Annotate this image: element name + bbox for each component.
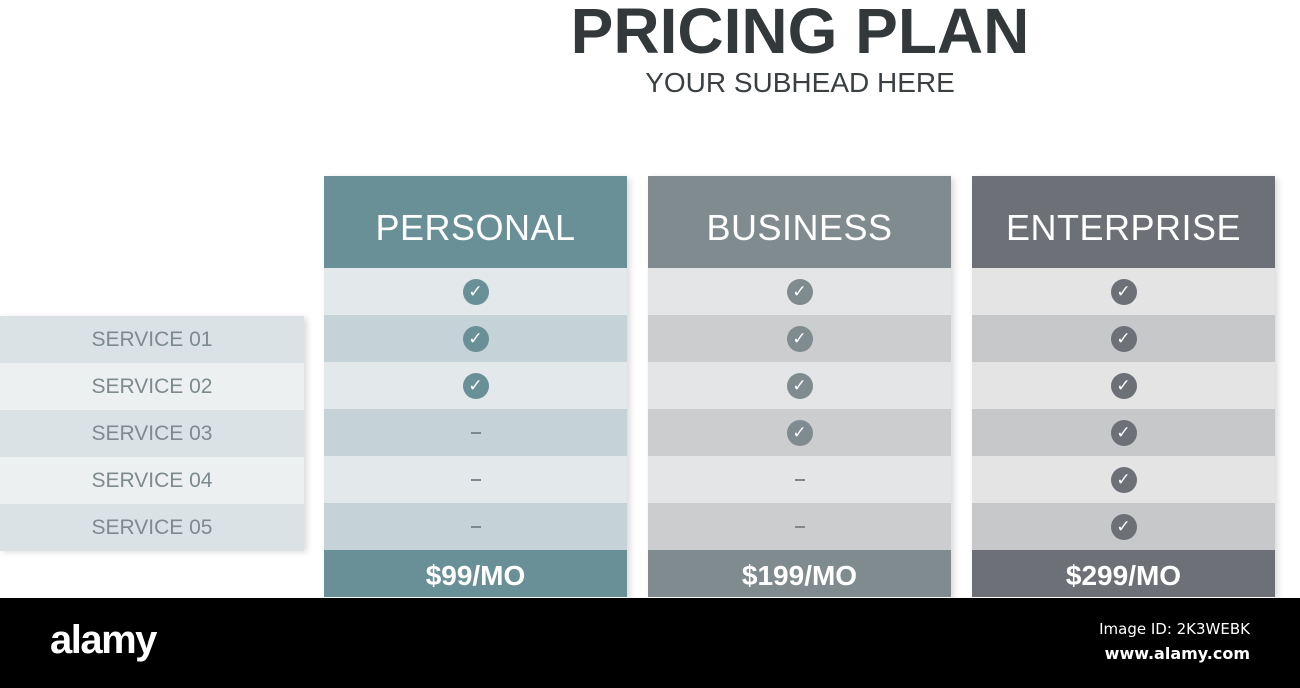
panel: business: ✓ xyxy=(792,422,807,442)
logo: alamy xyxy=(50,618,156,662)
panel: enterprise xyxy=(972,176,1275,598)
panel: services list: SERVICE 04 xyxy=(91,469,212,492)
url: www.alamy.com xyxy=(1105,644,1250,663)
panel: personal: ✓ xyxy=(468,328,483,348)
panel: enterprise: ✓ xyxy=(1116,376,1131,394)
panel: services list: SERVICE 05 xyxy=(91,516,212,539)
panel: personal: ✓ xyxy=(468,376,483,394)
panel: business: ✓ xyxy=(792,376,807,394)
panel: personal: PERSONAL xyxy=(375,207,576,248)
panel: business: $199/MO xyxy=(742,560,857,591)
panel: business: ✓ xyxy=(792,328,807,348)
panel: personal xyxy=(324,176,627,598)
panel: services list xyxy=(0,316,304,550)
panel: enterprise: ✓ xyxy=(1116,422,1131,442)
panel: services list: SERVICE 02 xyxy=(91,375,212,398)
image id: Image ID: 2K3WEBK xyxy=(1099,620,1250,638)
panel: services list: SERVICE 03 xyxy=(91,422,212,445)
panel: enterprise: ✓ xyxy=(1116,470,1131,488)
panel: business: ✓ xyxy=(792,282,807,300)
panel: enterprise: ✓ xyxy=(1116,282,1131,300)
panel: enterprise: ✓ xyxy=(1116,516,1131,536)
panel: enterprise: $299/MO xyxy=(1066,560,1181,591)
panel: business: BUSINESS xyxy=(706,207,893,248)
panel: enterprise: ✓ xyxy=(1116,328,1131,348)
panel: personal: $99/MO xyxy=(426,560,525,591)
panel: business xyxy=(648,176,951,598)
footer bar xyxy=(0,598,1300,688)
panel: enterprise: ENTERPRISE xyxy=(1006,207,1241,248)
panel: personal: ✓ xyxy=(468,282,483,300)
panel: services list: SERVICE 01 xyxy=(91,328,212,351)
subhead: YOUR SUBHEAD HERE xyxy=(645,67,955,98)
